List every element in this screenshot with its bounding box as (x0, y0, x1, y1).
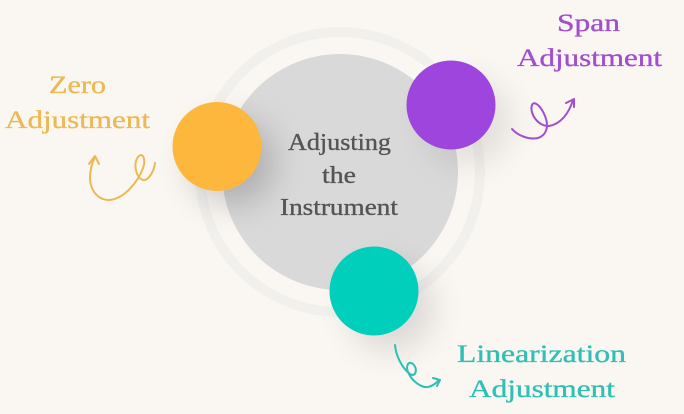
central title (280, 130, 398, 221)
circle: span (406, 60, 496, 150)
central title: Instrument (280, 195, 398, 221)
central title: the (322, 163, 356, 189)
arrow: zero (89, 155, 155, 200)
label: span adjustment: Adjustment (517, 45, 662, 72)
label: linearization adjustment: Linearization (457, 341, 627, 368)
central title: Adjusting (288, 130, 391, 156)
shadows (190, 80, 510, 350)
outer ring (200, 32, 480, 312)
circle: zero (172, 102, 262, 191)
arrow: span (512, 99, 574, 139)
arrow: linearization (395, 345, 440, 387)
circle: linearization (330, 246, 418, 336)
label: linearization adjustment: Adjustment (469, 376, 615, 403)
label: zero adjustment: Adjustment (5, 107, 150, 134)
label: zero adjustment (5, 72, 150, 134)
label: span adjustment: Span (557, 10, 621, 37)
label: span adjustment (517, 10, 662, 72)
label: linearization adjustment (457, 341, 627, 403)
label: zero adjustment: Zero (49, 72, 106, 99)
central circle (222, 54, 458, 290)
